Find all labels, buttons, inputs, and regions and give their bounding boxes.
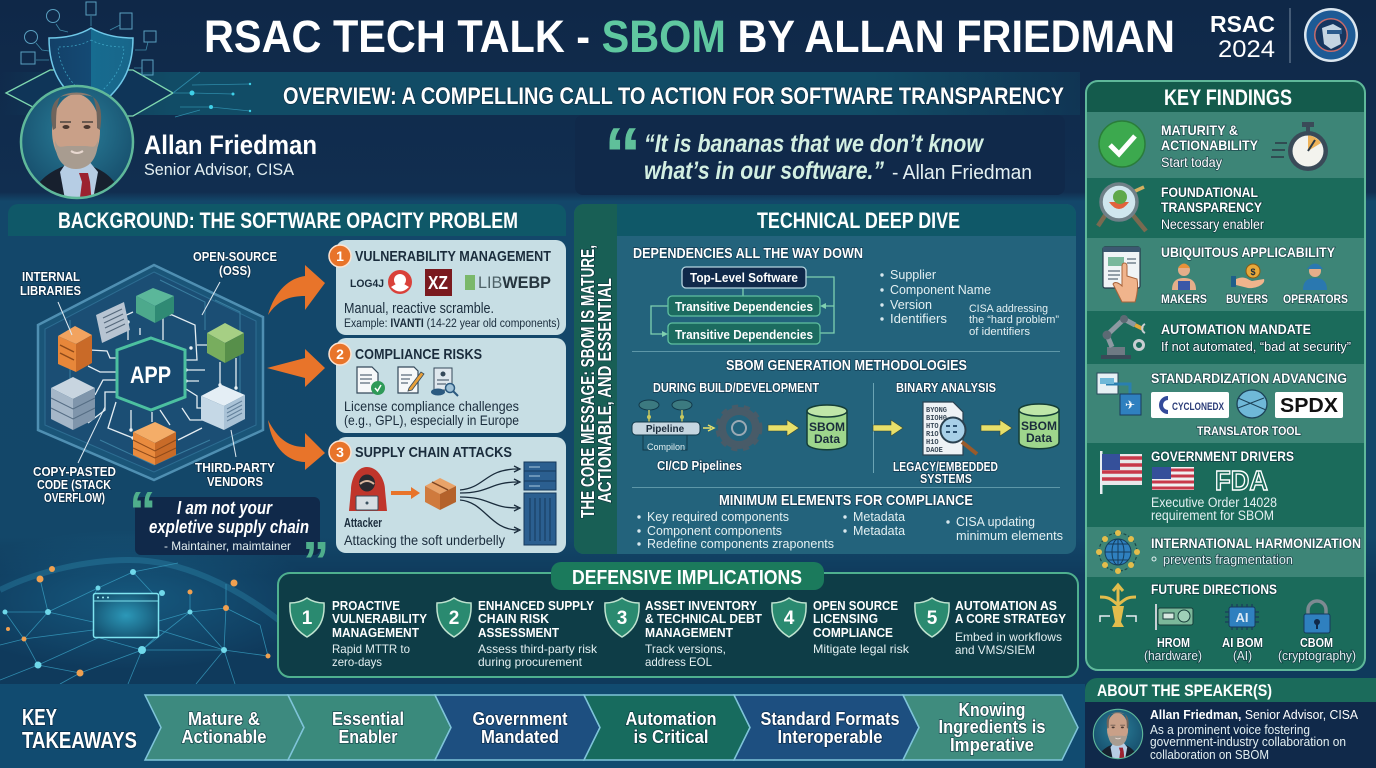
card body text: Example: IVANTI (14-22 year old components)	[344, 318, 560, 330]
speaker bio text: government-industry collaboration on	[1150, 735, 1346, 749]
icon: branching directions	[1100, 585, 1136, 622]
card: supply chain attacks	[329, 437, 566, 553]
subheading: minimum elements: MINIMUM ELEMENTS FOR COMPLIANCE	[719, 492, 973, 509]
card body text	[344, 398, 519, 428]
arrow	[873, 420, 903, 436]
implication 2: CHAIN RISK	[478, 611, 550, 626]
chevron: standard formats: Standard Formats	[760, 709, 900, 729]
chevron: automation is critical: is Critical	[634, 727, 708, 747]
APP core: APP	[130, 362, 171, 389]
icon: stopwatch	[1271, 122, 1328, 171]
chevron: knowing ingredients: Imperative	[950, 735, 1034, 755]
icon: binary document with magnifier: BYONG	[926, 407, 947, 415]
chevron: essential enabler: Enabler	[338, 727, 398, 747]
component: orange server	[58, 326, 92, 372]
number badge 3: 3	[336, 444, 344, 460]
icon: binary document with magnifier	[923, 402, 977, 455]
logo: SPDX	[1275, 392, 1343, 418]
CISA note: the “hard problem”	[969, 314, 1059, 326]
finding: foundational transparency: Necessary enabler	[1161, 216, 1264, 232]
implication 1: 1	[302, 608, 313, 629]
CISA note: of identifiers	[969, 326, 1031, 338]
CISA note	[969, 303, 1059, 338]
logo: SPDX: SPDX	[1280, 395, 1339, 417]
item: AI BOM	[1222, 604, 1263, 663]
speaker name block: Allan Friedman	[144, 130, 317, 160]
label: CI/CD pipelines: CI/CD Pipelines	[657, 458, 742, 473]
text: executive order	[1151, 495, 1277, 523]
text: executive order: requirement for SBOM	[1151, 508, 1274, 523]
card: compliance risks	[329, 338, 566, 433]
buyers	[1226, 264, 1268, 306]
label: internal libraries	[20, 269, 81, 298]
minimum elements list: Component components	[647, 523, 782, 538]
takeaways label: KEY	[22, 704, 57, 730]
finding: maturity and actionability: MATURITY &	[1161, 122, 1238, 138]
minimum elements list: Metadata	[853, 523, 906, 538]
identifier bullet list: Supplier	[890, 267, 937, 282]
identifier bullet list: Component Name	[890, 282, 991, 297]
icon: small flag	[1152, 467, 1194, 490]
item: HBOM hardware: (hardware)	[1144, 648, 1202, 663]
minimum elements list: Key required components	[647, 509, 789, 524]
label: legacy systems: SYSTEMS	[920, 472, 972, 486]
heading pill: DEFENSIVE IMPLICATIONS	[572, 567, 802, 589]
chevron: automation is critical	[584, 695, 750, 760]
card body text: License compliance challenges	[344, 398, 519, 414]
finding: international harmonization	[1086, 527, 1365, 577]
leader lines	[58, 282, 236, 463]
makers	[1161, 264, 1207, 306]
bottom band: key takeaways	[0, 684, 1085, 768]
icon: package	[425, 478, 456, 510]
overview band	[0, 72, 1080, 115]
implication 5: AUTOMATION AS	[955, 598, 1057, 613]
item: CBOM cryptography: CBOM	[1300, 635, 1333, 650]
callout: maintainer quote: I am not your	[177, 498, 273, 518]
implication 3: MANAGEMENT	[645, 625, 733, 640]
finding: ubiquitous applicability: UBIQUITOUS APPLICABILITY	[1161, 244, 1336, 260]
minimum elements list: Metadata	[853, 509, 906, 524]
heading	[617, 204, 1076, 236]
logo: Log4j: LOG4J	[350, 278, 384, 290]
implication 3: address EOL	[645, 655, 712, 669]
finding: maturity and actionability: ACTIONABILITY	[1161, 137, 1259, 153]
finding: foundational transparency: FOUNDATIONAL	[1161, 184, 1258, 200]
icon: waving flag	[1100, 451, 1142, 494]
speaker name block: Senior Advisor, CISA	[144, 160, 295, 179]
panel: technical deep dive	[574, 204, 1076, 554]
number badge 2: 2	[336, 346, 344, 362]
panel: main quote	[575, 112, 1065, 196]
logo: XZ	[425, 269, 452, 296]
icon: CI/CD pipeline	[632, 400, 700, 452]
logo: RSAC 2024: 2024	[1218, 36, 1275, 63]
finding: international harmonization: prevents fragmentation	[1163, 552, 1293, 567]
heading: TECHNICAL DEEP DIVE	[757, 208, 960, 233]
finding: standardization advancing: STANDARDIZATION ADVANCING	[1151, 370, 1347, 386]
chevron: government mandated: Government	[472, 709, 568, 729]
icon: binary document with magnifier: DAOE	[926, 447, 943, 455]
dependency tree diagram: Top-Level Software	[690, 270, 798, 285]
minimum elements list: minimum elements	[956, 528, 1063, 543]
CISA note: CISA addressing	[969, 303, 1048, 315]
implication 1: MANAGEMENT	[332, 625, 419, 640]
speaker bio text: collaboration on SBOM	[1150, 748, 1269, 762]
minimum elements list: CISA updating	[956, 514, 1035, 529]
heading	[1085, 678, 1376, 702]
panel: background section heading	[8, 204, 566, 236]
implication 1	[290, 598, 427, 669]
speaker name block	[144, 130, 317, 179]
finding: government drivers	[1086, 443, 1365, 527]
SBOM data cylinder: Data	[1026, 431, 1052, 445]
quote text: “It is bananas that we don’t know	[644, 130, 984, 158]
arrow: to supply chain attacks	[268, 420, 325, 470]
implication 5	[915, 598, 1066, 657]
SBOM data cylinder	[1019, 404, 1059, 449]
chevron: mature and actionable: Mature &	[188, 709, 260, 729]
icon: binary document with magnifier: H1O	[926, 439, 939, 447]
finding: automation mandate	[1086, 311, 1365, 364]
card body text: Manual, reactive scramble.	[344, 301, 494, 317]
operators: OPERATORS	[1283, 292, 1348, 306]
component: third-party server	[201, 385, 245, 430]
chevron: government mandated	[435, 695, 600, 760]
chevron: standard formats	[734, 695, 919, 760]
identifier bullet list: Identifiers	[890, 311, 947, 326]
arrow: to vulnerability management	[268, 265, 325, 315]
implication 2: ASSESSMENT	[478, 625, 559, 640]
component: right green cube	[207, 323, 244, 363]
chevron: standard formats: Interoperable	[778, 727, 882, 747]
chevron: knowing ingredients: Ingredients is	[938, 717, 1046, 737]
identifier bullet list	[880, 267, 991, 326]
implication 3: & TECHNICAL DEBT	[645, 611, 762, 626]
label: internal libraries: INTERNAL	[22, 269, 80, 284]
logo: libwebp: LIBWEBP	[478, 273, 551, 292]
chevron: automation is critical: Automation	[626, 709, 716, 729]
finding: foundational transparency	[1086, 178, 1365, 238]
finding: future directions	[1086, 577, 1365, 670]
logo: FDA: FDA	[1215, 465, 1268, 496]
overview heading: OVERVIEW: A COMPELLING CALL TO ACTION FOR SOFTWARE TRANSPARENCY	[283, 83, 1064, 110]
core message stripe: ACTIONABLE, AND ESSENTIAL	[595, 278, 615, 503]
logo: Log4j	[350, 270, 412, 294]
logo: CISA seal	[1304, 8, 1358, 62]
quote text: - Allan Friedman	[892, 162, 1032, 184]
finding: foundational transparency: TRANSPARENCY	[1161, 199, 1263, 215]
label: third-party vendors: THIRD-PARTY	[195, 460, 275, 475]
callout: maintainer quote: expletive supply chain	[149, 517, 309, 537]
panel: background section heading: BACKGROUND: THE SOFTWARE OPACITY PROBLEM	[58, 208, 518, 233]
finding: standardization advancing: ✈	[1125, 398, 1135, 412]
fan-out arrows	[460, 466, 520, 533]
core message stripe: THE CORE MESSAGE: SBOM IS MATURE,	[578, 245, 598, 518]
arrow	[391, 487, 420, 499]
item: HBOM hardware	[1144, 604, 1202, 663]
takeaways label: TAKEAWAYS	[22, 727, 137, 753]
SBOM data cylinder: SBOM	[1021, 419, 1057, 433]
quote text: what’s in our software.”	[644, 157, 884, 185]
panel: defensive implications	[278, 562, 1078, 677]
icon: browser window	[94, 594, 158, 638]
label: open source: (OSS)	[219, 263, 251, 278]
logo: CycloneDX: CYCLONEDX	[1172, 401, 1224, 413]
implication 4	[772, 598, 910, 656]
item: AI BOM: AI	[1236, 610, 1248, 625]
finding: maturity and actionability: Start today	[1161, 154, 1222, 170]
label: third-party vendors	[195, 460, 275, 489]
card body text: Attacker	[344, 515, 382, 530]
quote text	[644, 130, 1032, 185]
card title: VULNERABILITY MANAGEMENT	[355, 248, 551, 265]
icon: CI/CD pipeline: Pipeline	[646, 424, 685, 435]
logo: RSAC 2024: RSAC	[1210, 11, 1275, 37]
minimum elements list: Redefine components zraponents	[647, 536, 834, 551]
implication 3	[605, 598, 762, 669]
panel: key findings	[1086, 80, 1365, 670]
logo: CycloneDX	[1151, 392, 1229, 418]
component: silver server stack	[51, 377, 95, 430]
subheading: binary analysis: BINARY ANALYSIS	[896, 380, 996, 395]
label: copy-pasted code: OVERFLOW)	[44, 490, 105, 505]
implication 1: PROACTIVE	[332, 598, 400, 613]
diagram: application components hexagon	[38, 265, 263, 480]
speaker bio text	[1150, 707, 1358, 762]
speaker bio text: Allan Friedman, Senior Advisor, CISA	[1150, 707, 1358, 722]
implication 4: LICENSING	[813, 611, 878, 626]
arrow: to compliance risks	[267, 349, 325, 387]
number badge 3	[329, 441, 351, 463]
implication 2: 2	[449, 608, 459, 629]
component: top green cube	[136, 288, 174, 323]
connector lines	[88, 312, 236, 440]
item: AI BOM: AI BOM	[1222, 635, 1263, 650]
identifier bullet list: Version	[890, 297, 932, 312]
item: AI BOM: (AI)	[1233, 648, 1252, 663]
logo: RSAC 2024	[1210, 8, 1290, 63]
SBOM data cylinder	[807, 405, 847, 450]
operators	[1283, 264, 1348, 306]
icon: translator globe	[1237, 390, 1267, 418]
icon: attacker	[349, 467, 387, 511]
item: CBOM cryptography	[1278, 601, 1356, 663]
text: executive order: Executive Order 14028	[1151, 495, 1277, 510]
callout: maintainer quote: ”	[302, 530, 330, 592]
item: HBOM hardware: HROM	[1157, 635, 1190, 650]
card body text	[344, 515, 505, 548]
icon: build gear	[718, 407, 760, 449]
implication 4: OPEN SOURCE	[813, 598, 898, 613]
header title: RSAC TECH TALK - SBOM BY ALLAN FRIEDMAN	[204, 11, 1175, 62]
implication 5: 5	[927, 608, 938, 629]
chevron: government mandated: Mandated	[481, 727, 559, 747]
label: open source: OPEN-SOURCE	[193, 249, 277, 264]
callout: maintainer quote	[129, 480, 330, 592]
takeaways label	[22, 704, 137, 753]
chevron: knowing ingredients	[903, 695, 1078, 760]
implication 2: during procurement	[478, 655, 583, 669]
finding: maturity and actionability	[1086, 112, 1365, 178]
implication 4: Mitigate legal risk	[813, 642, 910, 656]
card title: SUPPLY CHAIN ATTACKS	[355, 444, 512, 461]
card: vulnerability management	[329, 240, 566, 335]
finding: future directions: FUTURE DIRECTIONS	[1151, 581, 1277, 597]
arrow	[768, 420, 799, 436]
core message stripe	[574, 204, 617, 554]
subheading: generation methodologies: SBOM GENERATION METHODOLOGIES	[726, 357, 967, 374]
makers: MAKERS	[1161, 292, 1207, 306]
chevron: knowing ingredients: Knowing	[958, 700, 1026, 720]
number badge 1: 1	[336, 248, 344, 264]
buyers: BUYERS	[1226, 292, 1268, 306]
label: internal libraries: LIBRARIES	[20, 283, 81, 298]
implication 4: COMPLIANCE	[813, 625, 893, 640]
APP core	[117, 338, 185, 410]
buyers: $	[1250, 267, 1256, 277]
heading: KEY FINDINGS	[1164, 85, 1292, 110]
icon: CI/CD pipeline: Compilon	[647, 442, 685, 452]
card body text: (e.g., GPL), especially in Europe	[344, 412, 519, 428]
implication 5: A CORE STRATEGY	[955, 611, 1066, 626]
label: copy-pasted code	[33, 464, 116, 505]
item: CBOM cryptography: (cryptography)	[1278, 648, 1356, 663]
dependency tree diagram: Transitive Dependencies	[675, 327, 813, 342]
chevron: mature and actionable: Actionable	[182, 727, 266, 747]
implication 3: Track versions,	[645, 642, 726, 656]
finding: automation mandate: If not automated, “bad at security”	[1161, 339, 1351, 354]
label: third-party vendors: VENDORS	[207, 474, 263, 489]
small arrow	[703, 425, 714, 431]
card title: COMPLIANCE RISKS	[355, 346, 482, 363]
callout: maintainer quote: “	[129, 480, 156, 542]
heading	[1086, 80, 1365, 112]
implication 5: Embed in workflows	[955, 630, 1062, 644]
label: open source	[193, 249, 277, 278]
label: legacy systems: LEGACY/EMBEDDED	[893, 460, 998, 474]
icon: target servers	[524, 462, 556, 545]
finding: automation mandate: AUTOMATION MANDATE	[1161, 321, 1311, 337]
number badge 2	[329, 343, 351, 365]
implication 2: ENHANCED SUPPLY	[478, 598, 594, 613]
implication 1: VULNERABILITY	[332, 611, 427, 626]
dependency tree diagram	[651, 267, 834, 344]
small portrait	[1093, 709, 1143, 762]
chevron: essential enabler	[288, 695, 451, 760]
logo: XZ: XZ	[428, 273, 448, 293]
icon: binary document with magnifier: R1O	[926, 431, 939, 439]
card body text: Attacking the soft underbelly	[344, 532, 505, 548]
minimum elements list	[637, 509, 1063, 551]
heading: ABOUT THE SPEAKER(S)	[1097, 681, 1272, 700]
icon: approved document	[357, 367, 385, 395]
SBOM data cylinder: Data	[814, 432, 840, 446]
component: document	[96, 302, 130, 343]
quote mark: “	[604, 112, 642, 196]
speaker portrait	[20, 85, 134, 205]
icon: binary document with magnifier: BIOH0	[926, 415, 947, 423]
SBOM data cylinder: SBOM	[809, 420, 845, 434]
card body text	[344, 301, 560, 330]
decorative shield illustration	[6, 2, 251, 117]
finding: government drivers: GOVERNMENT DRIVERS	[1151, 448, 1294, 464]
arrow	[981, 420, 1012, 436]
panel: about the speaker	[1085, 678, 1376, 768]
dependency tree diagram: Transitive Dependencies	[675, 299, 813, 314]
label: legacy systems	[893, 460, 998, 486]
subheading: during build: DURING BUILD/DEVELOPMENT	[653, 380, 819, 395]
finding: standardization advancing: TRANSLATOR TOOL	[1197, 424, 1301, 438]
implication 1: Rapid MTTR to	[332, 642, 410, 656]
callout: maintainer quote: - Maintainer, maimtainer	[164, 539, 291, 553]
chevron: mature and actionable	[145, 695, 304, 760]
finding: standardization advancing	[1086, 364, 1365, 443]
subheading: dependencies: DEPENDENCIES ALL THE WAY DOWN	[633, 245, 863, 262]
number badge 1	[329, 245, 351, 267]
speaker bio text: As a prominent voice fostering	[1150, 723, 1310, 737]
implication 2	[437, 598, 598, 669]
icon: legal review	[431, 368, 458, 396]
implication 1: zero-days	[332, 655, 382, 669]
implication 4: 4	[784, 608, 795, 629]
icon: binary document with magnifier: HTO	[926, 423, 939, 431]
chevron: essential enabler: Essential	[332, 709, 404, 729]
background network decoration	[0, 530, 320, 684]
implication 2: Assess third-party risk	[478, 642, 598, 656]
icon: edit document	[398, 367, 424, 393]
implication 3: ASSET INVENTORY	[645, 598, 757, 613]
finding: ubiquitous applicability	[1086, 238, 1365, 311]
implication 3: 3	[617, 608, 627, 629]
label: copy-pasted code: CODE (STACK	[37, 477, 112, 492]
implication 5: and VMS/SIEM	[955, 643, 1035, 657]
component: orange box stack	[133, 422, 176, 465]
label: copy-pasted code: COPY-PASTED	[33, 464, 116, 479]
